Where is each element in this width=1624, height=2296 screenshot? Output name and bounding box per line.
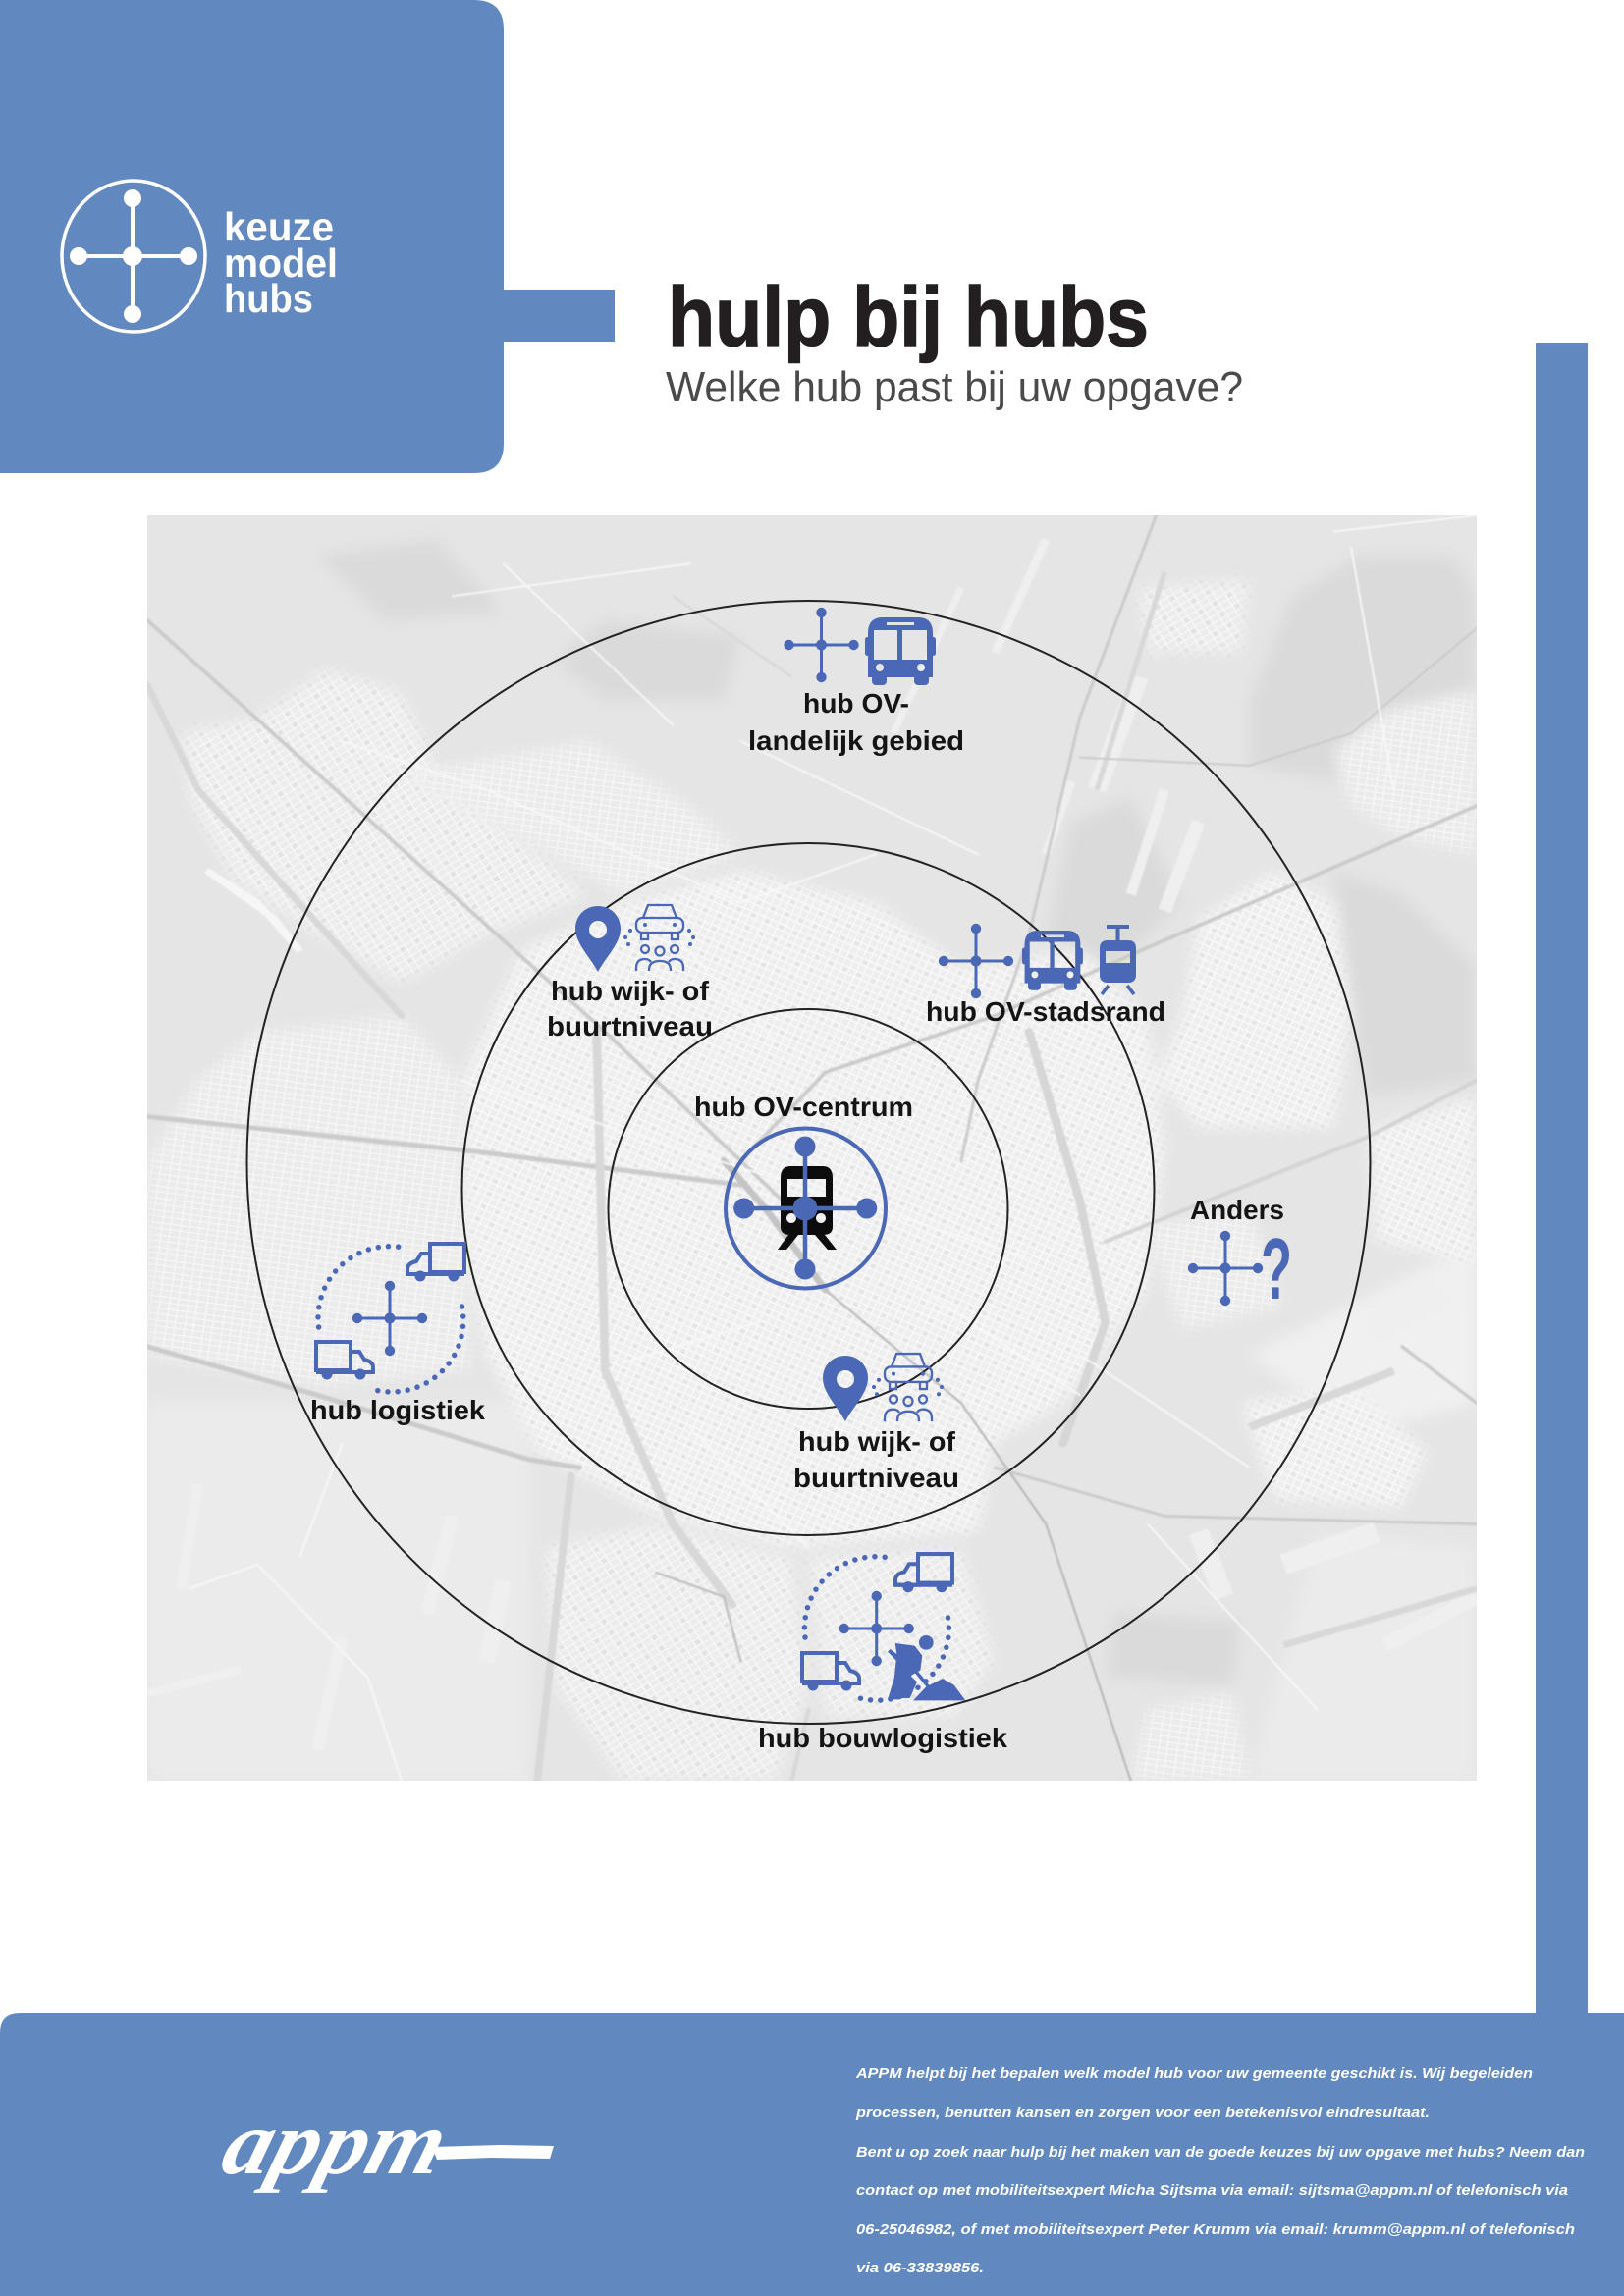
logo text [224,204,338,321]
label [547,976,713,1041]
logo text: keuze [224,204,334,249]
icon: train with hub circle [726,1129,886,1288]
label [748,688,964,756]
title: hulp bij hubs [668,271,1149,364]
footer text: contact op met mobiliteitsexpert Micha Sijtsma via email: sijtsma@appm.nl of telefonisch via [856,2182,1568,2199]
hub: wijk- of buurtniveau, upper [547,905,713,1041]
hub: Anders [1188,1195,1292,1317]
icon: pin, car and people [823,1354,944,1421]
footer text [855,2065,1585,2276]
label [793,1426,959,1493]
icon: hub cross, trucks, worker and dotted circle [802,1554,965,1700]
footer text: APPM helpt bij het bepalen welk model hub voor uw gemeente geschikt is. Wij begeleiden [855,2065,1533,2082]
label: Anders [1190,1195,1284,1225]
label: hub logistiek [310,1395,485,1425]
subtitle: Welke hub past bij uw opgave? [666,363,1243,411]
icon: hub cross, bus and tram [939,924,1136,998]
map background [147,515,1477,1781]
label: hub OV-centrum [694,1092,913,1122]
label: landelijk gebied [748,725,964,756]
icon: pin, car and people [575,905,695,972]
APPM signature logo: appm [212,2092,460,2194]
footer panel [0,2013,1624,2296]
label: hub wijk- of [551,976,710,1006]
label: hub bouwlogistiek [758,1723,1007,1753]
footer text: 06-25046982, of met mobiliteitsexpert Peter Krumm via email: krumm@appm.nl of telefonisch [856,2221,1575,2238]
logo text: hubs [224,276,313,321]
hub: OV stadsrand [926,924,1165,1027]
logo icon: hub circle [62,181,205,332]
footer text: Bent u op zoek naar hulp bij het maken van de goede keuzes bij uw opgave met hubs? Neem dan [856,2144,1585,2161]
label: hub wijk- of [798,1426,956,1457]
header panel: logo block [0,0,504,473]
hub: bouwlogistiek [758,1554,1007,1753]
hub: logistiek [310,1244,485,1425]
label: hub OV- [803,688,909,719]
field strips [892,540,1377,1598]
label: buurtniveau [547,1011,713,1041]
concentric rings [247,601,1371,1724]
footer text: processen, benutten kansen en zorgen voor een betekenisvol eindresultaat. [855,2105,1430,2121]
APPM signature logo [212,2092,554,2194]
hub: wijk- of buurtniveau, lower [793,1354,959,1493]
label: hub OV-stadsrand [926,996,1165,1027]
logo text: model [224,240,338,286]
connector bar [504,290,615,342]
hub: OV centrum [694,1092,913,1288]
icon: hub cross and bus [784,608,936,685]
footer text: via 06-33839856. [856,2260,984,2276]
icon: hub cross and question mark: ? [1261,1220,1292,1317]
right vertical bar [1536,343,1588,2015]
roads [147,515,1477,1781]
hub: OV landelijk gebied [748,608,964,756]
label: buurtniveau [793,1463,959,1493]
icon: hub cross, trucks and dotted circle [316,1244,464,1392]
